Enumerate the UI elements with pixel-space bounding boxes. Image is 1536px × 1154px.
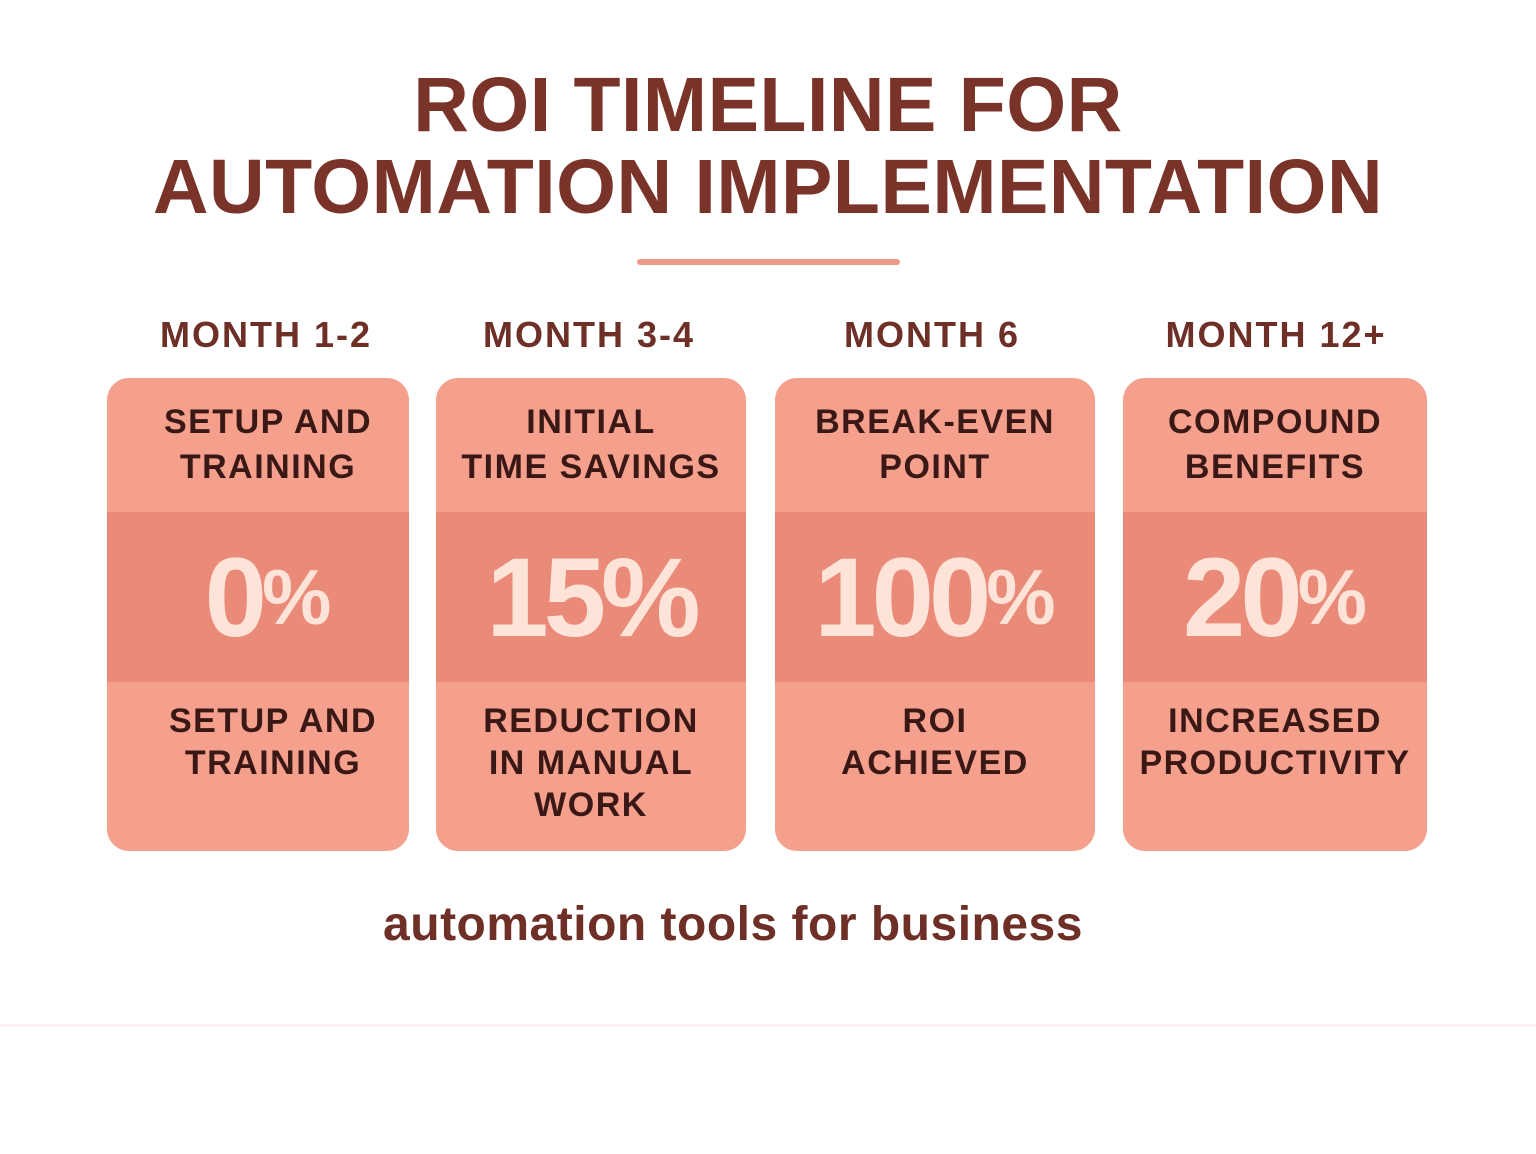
card description: REDUCTION — [483, 702, 699, 740]
card heading: BENEFITS — [1185, 448, 1365, 486]
divider accent — [637, 259, 900, 265]
card heading: COMPOUND — [1168, 403, 1382, 441]
card heading — [1168, 403, 1382, 486]
card description — [483, 702, 699, 824]
card description — [169, 702, 377, 782]
percentage: 0 — [205, 534, 262, 660]
footer caption: automation tools for business — [383, 898, 1083, 951]
card heading — [461, 403, 721, 486]
card heading: TIME SAVINGS — [461, 448, 721, 486]
card: month 6 — [775, 378, 1095, 851]
card heading: POINT — [879, 448, 991, 486]
card description: PRODUCTIVITY — [1139, 744, 1411, 782]
card description: SETUP AND — [169, 702, 377, 740]
month label 2: MONTH 3-4 — [483, 314, 695, 355]
card heading: BREAK-EVEN — [815, 403, 1055, 441]
card description: ROI — [903, 702, 967, 740]
card description: IN MANUAL — [489, 744, 693, 782]
percentage — [436, 512, 746, 682]
card description — [1139, 702, 1411, 782]
month label 3: MONTH 6 — [844, 314, 1020, 355]
title: AUTOMATION IMPLEMENTATION — [153, 144, 1383, 230]
percentage — [1123, 512, 1427, 682]
card description: WORK — [534, 786, 648, 824]
percentage: 15% — [486, 534, 696, 660]
percentage: % — [262, 552, 331, 640]
card heading: INITIAL — [526, 403, 656, 441]
card heading: TRAINING — [180, 448, 356, 486]
card description: TRAINING — [185, 744, 361, 782]
card: month 1-2 — [107, 378, 409, 851]
percentage: % — [986, 552, 1056, 640]
card description: ACHIEVED — [841, 744, 1029, 782]
card heading — [815, 403, 1055, 486]
percentage — [107, 512, 409, 682]
card: month 12+ — [1123, 378, 1427, 851]
percentage — [775, 512, 1095, 682]
card description — [841, 702, 1029, 782]
card: month 3-4 — [436, 378, 746, 851]
month label 1: MONTH 1-2 — [160, 314, 372, 355]
card heading: SETUP AND — [164, 403, 372, 441]
month label 4: MONTH 12+ — [1165, 314, 1387, 355]
percentage: 100 — [814, 534, 986, 660]
title: ROI TIMELINE FOR — [413, 62, 1123, 148]
percentage: % — [1298, 552, 1367, 640]
title — [153, 62, 1383, 230]
percentage: 20 — [1183, 534, 1298, 660]
card description: INCREASED — [1168, 702, 1382, 740]
card heading — [164, 403, 372, 486]
